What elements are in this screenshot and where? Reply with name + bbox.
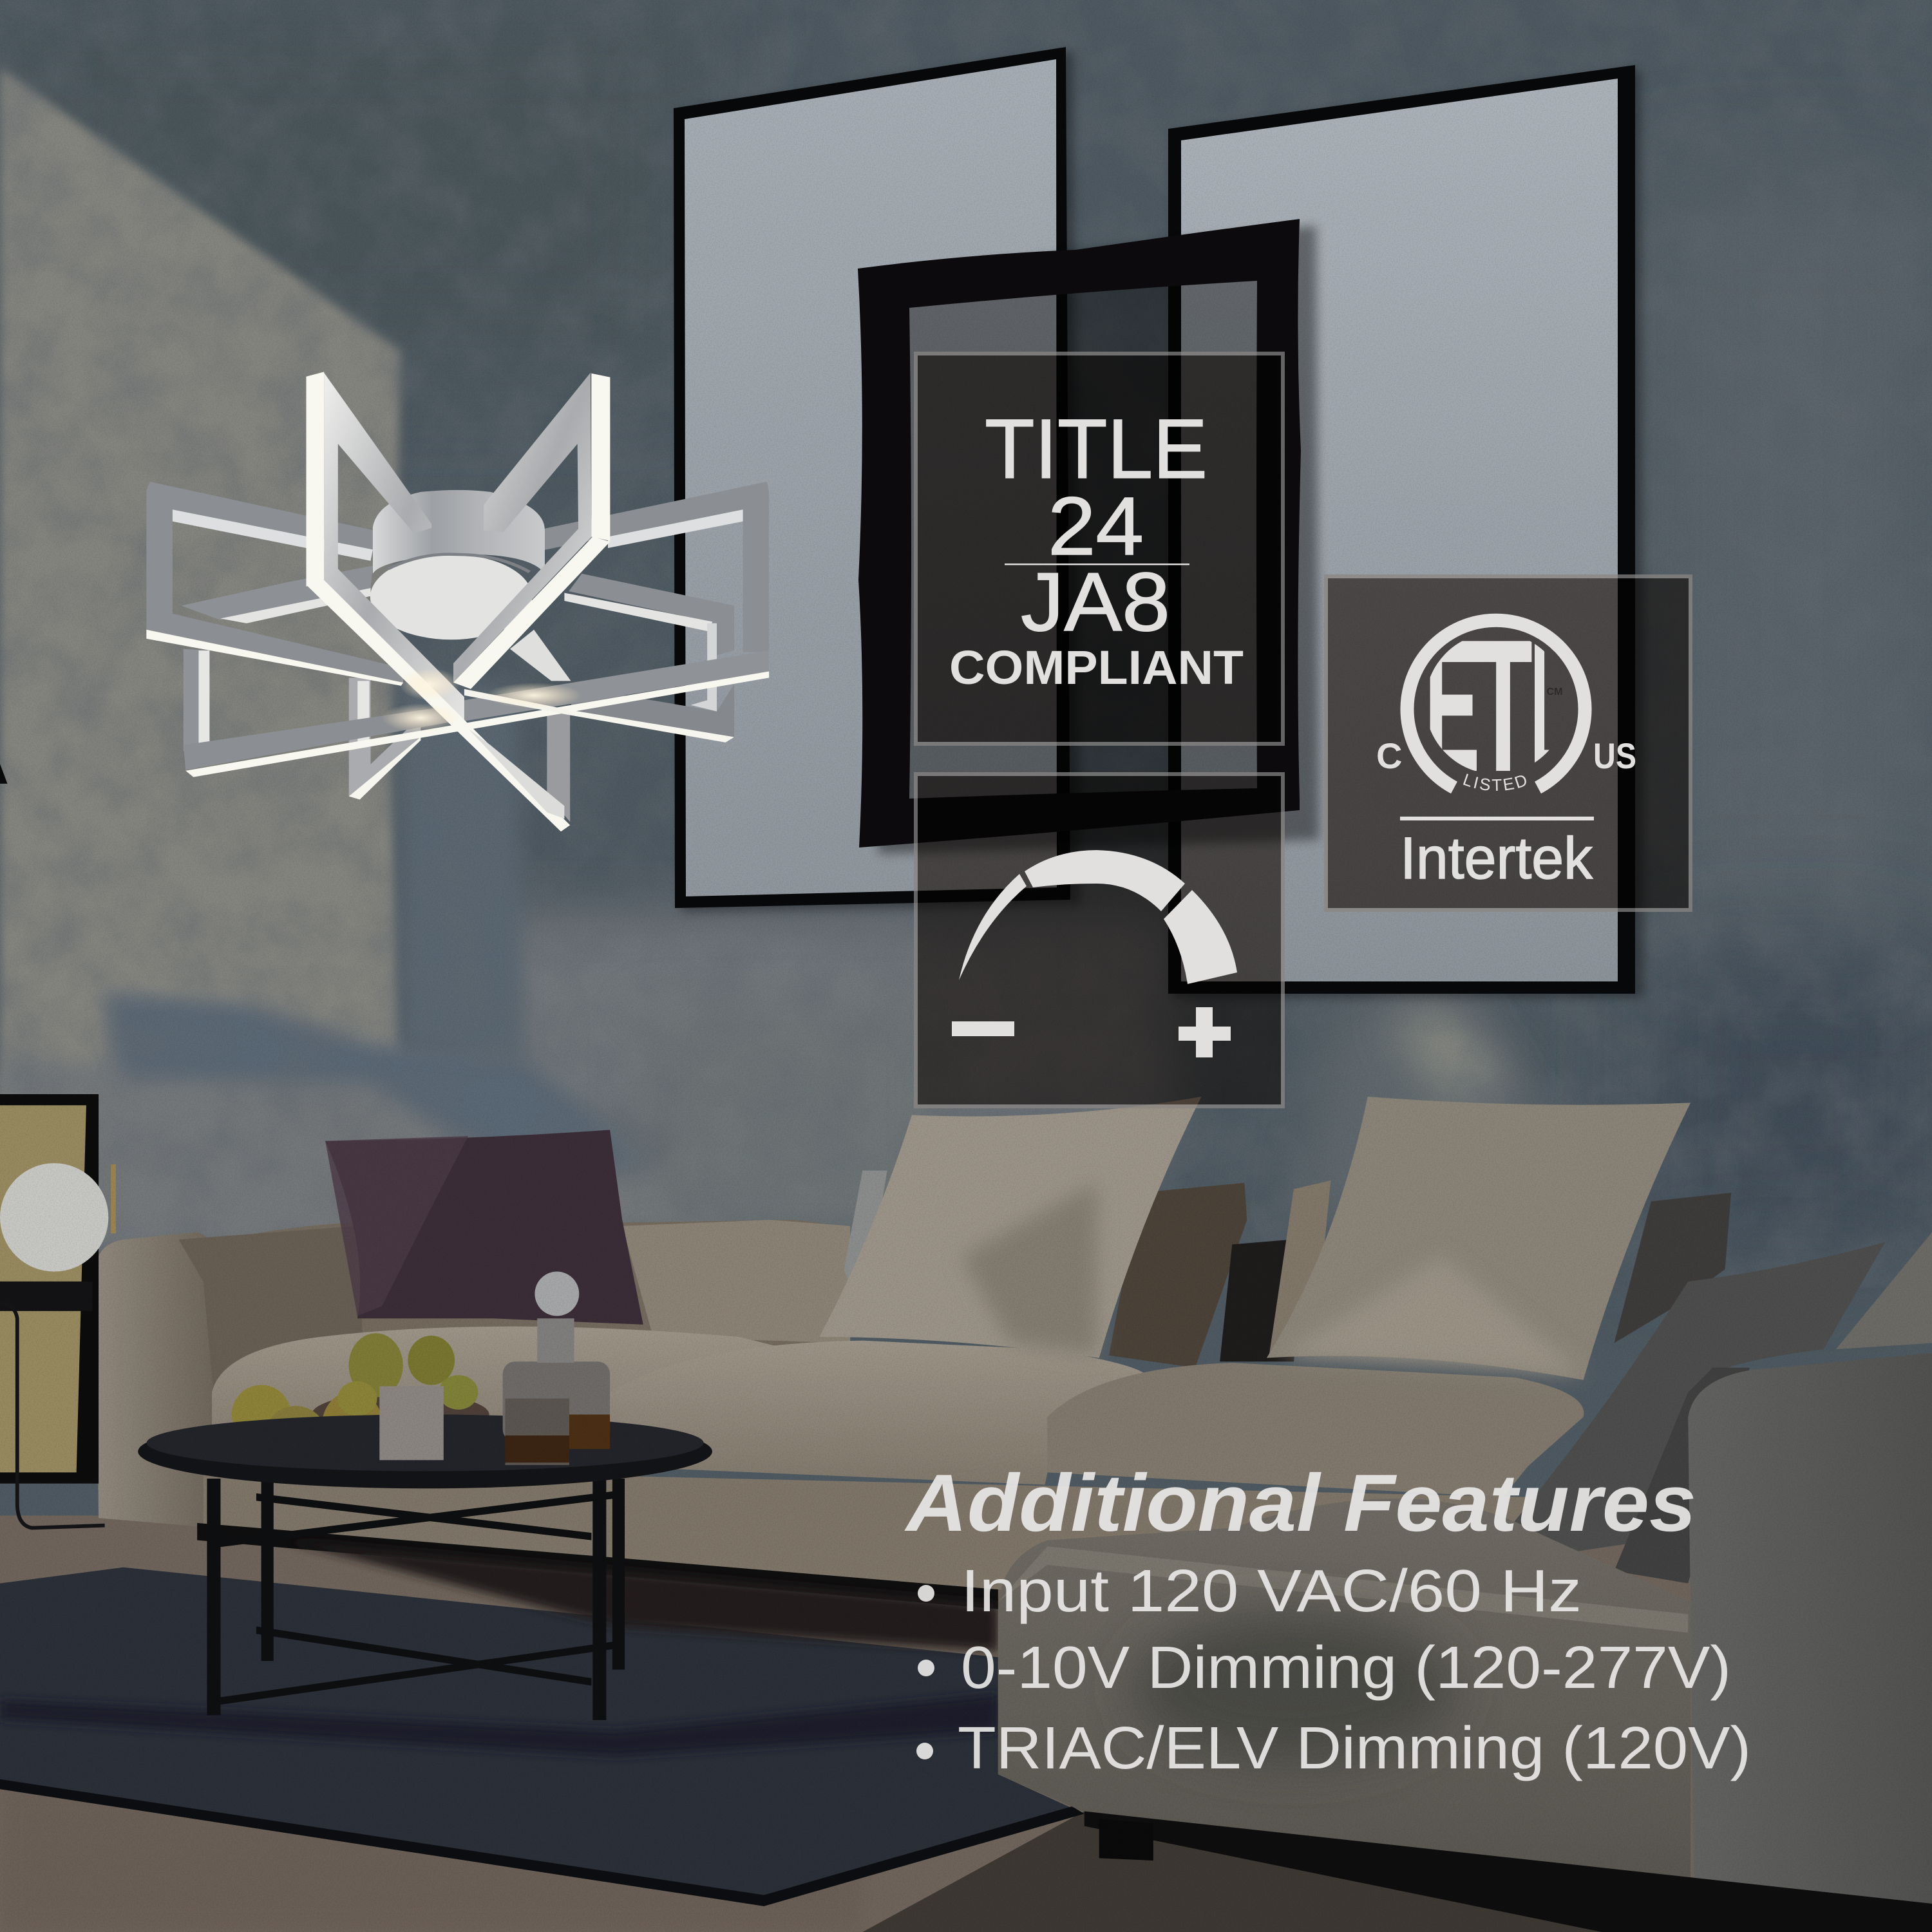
feature: TRIAC/ELV dimming: TRIAC/ELV Dimming (120V) <box>958 1714 1751 1781</box>
icon: ETL mark: US <box>1593 735 1636 776</box>
sofa back left and arm <box>96 1220 850 1528</box>
side table <box>0 1282 92 1311</box>
hub <box>370 490 545 639</box>
left lower bar <box>184 649 464 770</box>
rear lower frames <box>349 630 571 822</box>
large right poster frame <box>1168 65 1644 998</box>
outer ring <box>1407 620 1585 788</box>
seat cushions <box>212 1327 813 1466</box>
panel: Title 24 JA8 compliance <box>914 352 1285 746</box>
ETL letters: E <box>1425 601 1480 811</box>
icon: ETL mark: L <box>1530 601 1571 811</box>
ETL letters: T <box>1473 601 1533 811</box>
panel background <box>1324 574 1692 912</box>
title text <box>949 401 1244 694</box>
left side objects <box>0 764 116 1528</box>
CM mark: CM <box>1547 687 1562 697</box>
sofa <box>96 1097 1731 1651</box>
front lit strip <box>185 671 769 777</box>
left back frame <box>146 482 403 683</box>
title text: JA8 <box>1021 556 1170 649</box>
decanter <box>503 1272 610 1465</box>
floor <box>0 1515 1932 1932</box>
left lit strip <box>146 630 403 686</box>
title text: COMPLIANT <box>949 641 1244 694</box>
icon: ETL mark <box>1376 613 1636 793</box>
panel: dimming <box>914 772 1285 1108</box>
large beige pillow right <box>1267 1097 1690 1380</box>
dark cushion behind <box>1109 1183 1247 1368</box>
large beige pillow left <box>819 1097 1201 1358</box>
country marks: C <box>1376 735 1402 776</box>
title text: TITLE <box>985 401 1208 496</box>
tall left arm <box>306 372 570 831</box>
sofa base <box>204 1466 1528 1589</box>
gray chaise and pillows <box>998 1232 1932 1932</box>
large left poster frame <box>674 47 1081 912</box>
icon: dimmer arc <box>959 850 1237 984</box>
whisky glass <box>379 1386 444 1460</box>
tall right arm <box>453 373 610 689</box>
product: star ceiling light <box>146 372 769 831</box>
feature: input: Input 120 VAC/60 Hz <box>961 1557 1582 1624</box>
warm glow <box>381 668 582 732</box>
feature: 0-10V dimming: 0-10V Dimming (120-277V) <box>961 1634 1731 1701</box>
right back frame <box>536 482 769 652</box>
icon: minus <box>952 1021 1014 1036</box>
panel background <box>914 352 1285 746</box>
small dark wood frame <box>858 219 1319 854</box>
listed: LISTED <box>1463 773 1526 791</box>
divider rule <box>1005 564 1189 565</box>
legs <box>207 1479 625 1720</box>
purple pillow <box>325 1130 643 1325</box>
globe lamp <box>0 1163 108 1272</box>
rug <box>0 1567 1084 1906</box>
title text: 24 <box>1048 480 1144 573</box>
table top <box>138 1414 712 1488</box>
center left band <box>181 565 373 623</box>
icon: plus <box>1179 1007 1231 1057</box>
right middle frame <box>564 574 734 743</box>
coffee table <box>138 1272 712 1720</box>
panel background <box>914 772 1285 1108</box>
panel: ETL listed Intertek <box>1324 574 1692 912</box>
additional features <box>904 1457 1751 1781</box>
divider rule <box>1400 817 1594 820</box>
right lower band <box>464 650 769 721</box>
heading: Additional Features <box>904 1457 1696 1548</box>
pears and bowl <box>232 1333 489 1465</box>
art canvas <box>0 1094 99 1484</box>
Intertek wordmark: Intertek <box>1400 826 1593 891</box>
